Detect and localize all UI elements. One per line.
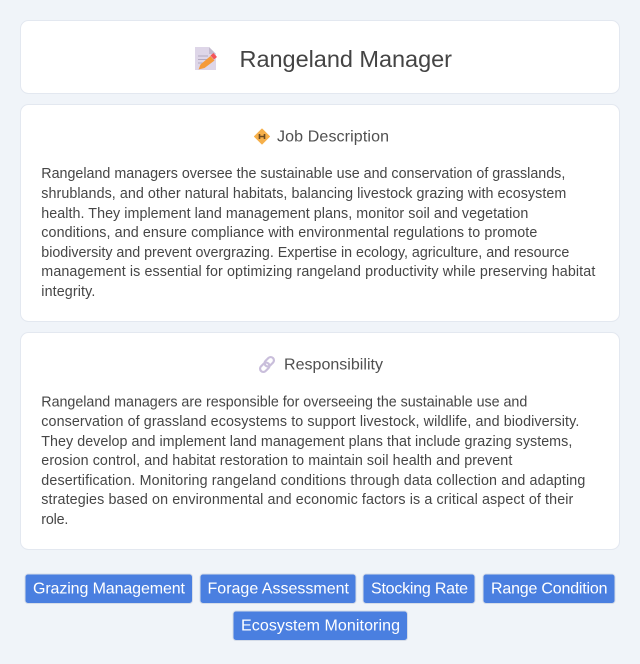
icon: document with pencil	[195, 47, 217, 70]
tag: Forage Assessment	[200, 574, 356, 604]
text block: job description: shrublands, and other natural habitats, balancing livestock grazing with ecosystem	[41, 186, 566, 202]
text block: responsibility: strategies based on environmental and economic factors is a critical aspect of their	[41, 492, 574, 508]
icon: chain link	[259, 356, 275, 373]
text block: job description: Rangeland managers oversee the sustainable use and conservation of grasslands,	[41, 166, 565, 182]
tag: Stocking Rate	[363, 574, 475, 604]
title: Rangeland Manager	[240, 46, 452, 72]
icon: road-sign diamond	[254, 129, 270, 144]
heading: job description: Job Description	[277, 128, 389, 146]
text block: responsibility: conservation of grassland ecosystems to support livestock, wildlife, and biodiversity.	[41, 414, 579, 430]
tag: Forage Assessment: Forage Assessment	[208, 580, 350, 598]
tag: Stocking Rate: Stocking Rate	[371, 580, 468, 598]
panel: responsibility	[20, 332, 620, 550]
text block: job description: management is essential for optimizing rangeland productivity while preserving habitat	[41, 264, 595, 280]
tag: Range Condition: Range Condition	[491, 580, 608, 598]
tag: Grazing Management	[25, 574, 192, 604]
tag: Ecosystem Monitoring: Ecosystem Monitoring	[241, 618, 400, 634]
text block: responsibility: erosion control, and habitat restoration to maintain soil health and prevent	[41, 453, 512, 469]
panel: job description	[20, 104, 620, 322]
panel: title header	[20, 20, 620, 94]
text block: job description: biodiversity and prevent overgrazing. Expertise in ecology, agriculture, and resource	[41, 245, 569, 261]
text block: responsibility	[41, 394, 585, 528]
text block: responsibility: desertification. Monitoring rangeland conditions through data collection and adapting	[41, 473, 585, 489]
heading: responsibility: Responsibility	[284, 356, 383, 374]
text block: responsibility: Rangeland managers are responsible for overseeing the sustainable use and	[41, 394, 527, 410]
text block: job description: integrity.	[41, 284, 95, 300]
text block: responsibility: They develop and implement land management plans that include grazing systems,	[41, 434, 572, 450]
text block: job description	[41, 166, 595, 300]
text block: job description: health. They implement land management plans, monitor soil and vegetation	[41, 206, 528, 222]
text block: responsibility: role.	[41, 512, 68, 528]
tag: Range Condition	[483, 574, 615, 604]
tag: Ecosystem Monitoring	[233, 611, 408, 640]
tag: Grazing Management: Grazing Management	[33, 580, 186, 598]
text block: job description: conditions, and ensure compliance with environmental regulations to promote	[41, 225, 537, 241]
